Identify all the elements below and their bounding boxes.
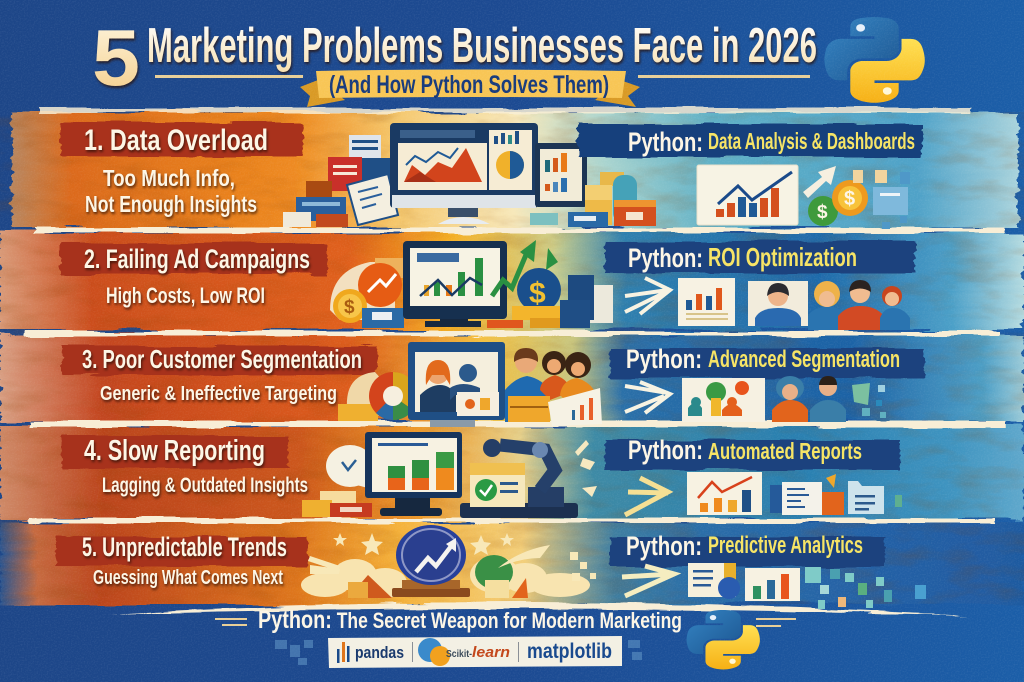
python heading	[610, 531, 885, 567]
sparkle shards	[575, 440, 597, 497]
subtitle ribbon	[155, 70, 810, 107]
python heading	[605, 241, 915, 273]
dashes left	[215, 618, 247, 626]
python heading: Advanced Segmentation	[708, 346, 900, 373]
description: Too Much Info,	[103, 165, 235, 191]
illustration: monitor dashboard	[390, 123, 538, 224]
panel: footer	[215, 606, 796, 669]
illustration: dollar badge and blocks: $	[529, 277, 546, 310]
solution card: document	[688, 563, 740, 599]
icon: arrow	[622, 566, 674, 596]
description: Guessing What Comes Next	[93, 567, 283, 589]
icon: up arrow	[803, 166, 836, 198]
panel: problem 2	[60, 240, 915, 330]
solution card: bars	[745, 568, 800, 601]
subtitle ribbon: (And How Python Solves Them)	[329, 71, 609, 99]
illustration: file stacks	[283, 135, 398, 227]
python heading: Automated Reports	[708, 438, 862, 464]
python heading	[610, 344, 925, 378]
illustration: pie and box	[338, 372, 418, 421]
divider two	[518, 642, 519, 662]
pandas	[337, 642, 404, 663]
icon: two people	[772, 376, 846, 422]
colour bands	[0, 112, 1024, 604]
matplotlib: matplotlib	[527, 640, 612, 663]
illustration: triangles and leaves	[348, 555, 528, 598]
panel: problem 3	[62, 342, 925, 427]
panel: problem 4	[62, 432, 902, 518]
stars and sparks	[308, 533, 596, 581]
description: Generic & Ineffective Targeting	[100, 383, 337, 405]
illustration: monitor with video call	[408, 342, 505, 427]
icon: arrow	[625, 382, 670, 413]
ribbon heading: 3. Poor Customer Segmentation	[82, 344, 362, 374]
illustration: tablet chart	[535, 143, 587, 207]
solution card: bar chart	[678, 278, 735, 326]
illustration: team of people	[505, 348, 595, 422]
library logos card	[328, 636, 622, 668]
python heading: ROI Optimization	[708, 242, 857, 272]
illustration: monitor with bars	[365, 432, 462, 516]
solution: documents	[770, 474, 844, 515]
illustration: coins and growth	[330, 258, 404, 328]
panel: problem 1	[60, 122, 923, 229]
description	[85, 165, 257, 217]
solution card: line chart	[697, 165, 798, 225]
cream separators	[25, 108, 1005, 616]
icon: coins: $	[817, 202, 828, 223]
title block	[92, 13, 817, 107]
python heading: Python:	[628, 435, 703, 465]
python heading: Python:	[628, 243, 703, 273]
pandas: pandas	[355, 643, 404, 662]
illustration: dollar badge and blocks	[487, 268, 613, 328]
illustration: monitor with chart	[403, 240, 558, 327]
panel: problem 5	[56, 525, 926, 609]
illustration: boxes	[530, 172, 656, 227]
icon: three people	[808, 280, 910, 330]
dashes right	[756, 618, 796, 627]
scikit-learn	[418, 638, 510, 666]
python heading: Predictive Analytics	[708, 532, 863, 559]
solution card: report chart	[687, 472, 762, 515]
scikit-learn: Scikit-	[446, 649, 472, 660]
icon: coins	[808, 180, 868, 226]
small data tiles	[853, 170, 910, 229]
icon: python logo bottom	[687, 610, 760, 669]
illustration: coins and growth: $	[344, 297, 355, 318]
illustration: crystal ball	[392, 525, 470, 597]
ribbon heading: 1. Data Overload	[84, 124, 268, 157]
icon: folder	[848, 481, 902, 514]
python heading	[605, 435, 900, 470]
faded tiles by card	[275, 640, 642, 665]
python heading: Data Analysis & Dashboards	[708, 128, 915, 154]
small data tiles	[805, 567, 926, 609]
icon: python logo top	[824, 17, 925, 103]
illustration: robot arm with clipboard	[460, 439, 578, 518]
python heading: Python:	[628, 127, 703, 157]
icon: arrow	[625, 478, 668, 515]
illustration: clouds	[301, 557, 590, 598]
small data tiles	[852, 383, 886, 418]
illustration: boxes	[302, 491, 372, 517]
illustration: chart and box	[508, 388, 602, 426]
icon: speech bubble	[326, 445, 374, 488]
ribbon heading: 5. Unpredictable Trends	[82, 532, 287, 562]
solution card: segments	[682, 378, 765, 422]
description: Lagging & Outdated Insights	[102, 474, 308, 497]
divider one	[412, 642, 413, 662]
description: Not Enough Insights	[85, 191, 257, 217]
big number 5: 5	[92, 13, 140, 102]
ribbon heading: 2. Failing Ad Campaigns	[84, 244, 310, 274]
ribbon heading	[62, 344, 377, 375]
band mottling	[0, 112, 1024, 604]
footer tagline: Python: The Secret Weapon for Modern Marketing	[258, 606, 682, 634]
python heading	[578, 124, 923, 157]
python heading: Python:	[626, 531, 702, 561]
python heading: Python:	[626, 344, 702, 374]
scikit-learn: learn	[472, 644, 510, 661]
icon: coins: $	[844, 188, 855, 210]
ribbon heading: 4. Slow Reporting	[84, 435, 265, 467]
description: High Costs, Low ROI	[106, 283, 265, 308]
icon: arrow	[625, 278, 670, 314]
ribbon heading	[56, 532, 308, 566]
solution card: person	[748, 281, 808, 326]
